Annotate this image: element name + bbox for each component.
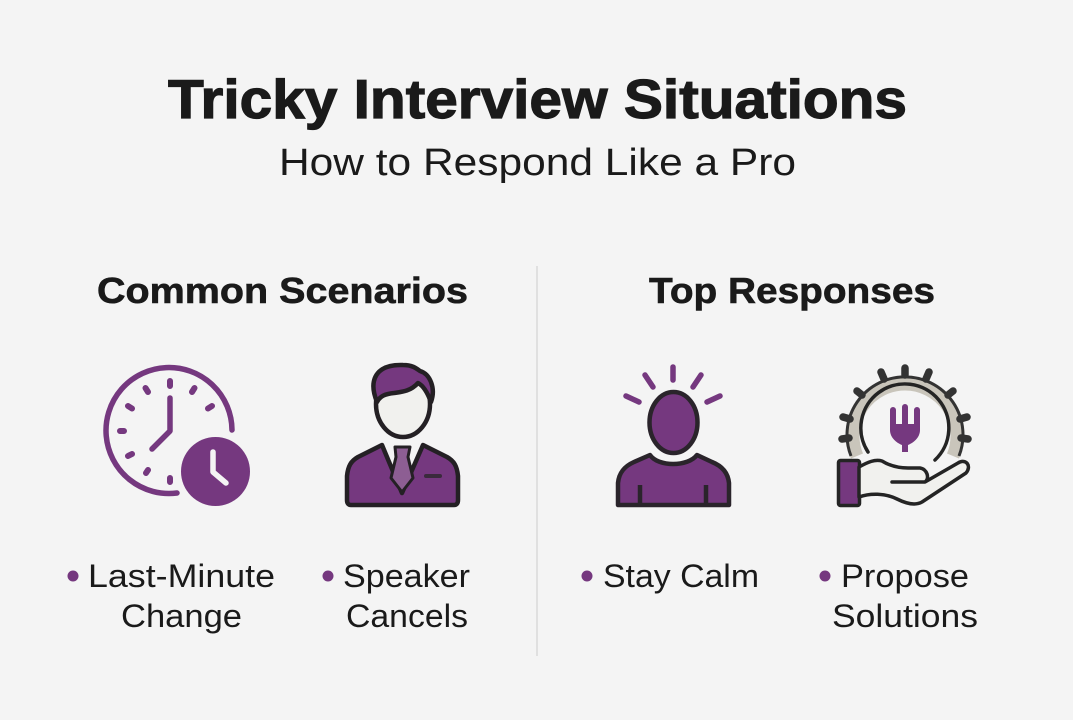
label: last-minute change: [68, 558, 275, 634]
label: speaker cancels: [322, 558, 470, 634]
icon detail: plug: [893, 407, 917, 426]
icon: businessman: [347, 365, 458, 505]
label: propose solutions: Propose: [841, 558, 969, 594]
title: Tricky Interview Situations: [168, 68, 907, 130]
label: last-minute change: Last-Minute: [88, 558, 275, 594]
icon: clock: [106, 368, 250, 506]
label: last-minute change: Change: [121, 598, 242, 634]
label: propose solutions: [820, 558, 978, 634]
icon: calm person: [618, 367, 729, 505]
label: speaker cancels: Speaker: [343, 558, 470, 594]
subtitle: How to Respond Like a Pro: [279, 142, 796, 184]
label: stay calm: Stay Calm: [603, 558, 759, 594]
heading: top responses: Top Responses: [649, 270, 935, 311]
heading: common scenarios: Common Scenarios: [97, 270, 468, 311]
icon: gear and hand with plug: [838, 368, 968, 506]
label: speaker cancels: Cancels: [346, 598, 468, 634]
label: propose solutions: Solutions: [832, 598, 978, 634]
